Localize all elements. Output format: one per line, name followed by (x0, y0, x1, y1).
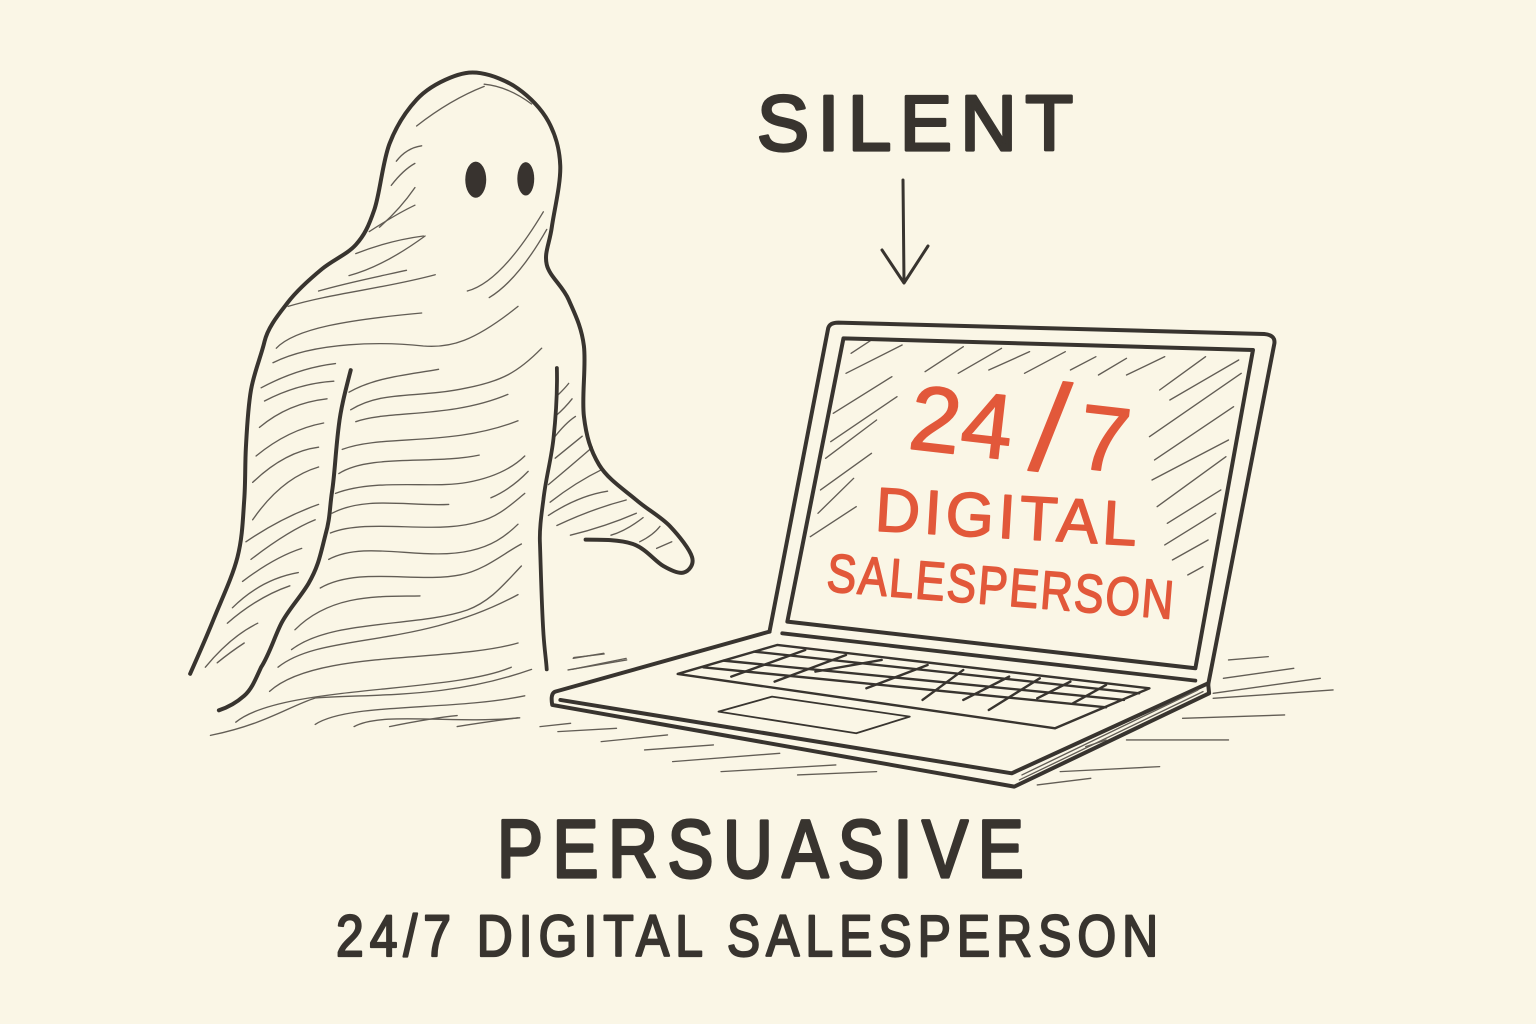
touchpad (718, 697, 910, 733)
icon: ghost left eye (465, 162, 486, 198)
screen text: 24/7: 4 (956, 373, 1019, 480)
laptop lid outer frame (770, 323, 1274, 685)
illustration: ghost (190, 73, 693, 735)
screen text: SALESPERSON: SALESPERSON (825, 543, 1176, 631)
screen text: 24/7: 7 (1073, 386, 1136, 493)
screen text: 24/7: / (1025, 358, 1076, 500)
arrow: pointing down to laptop (882, 180, 928, 283)
laptop screen bezel (787, 338, 1253, 668)
laptop base (552, 632, 1209, 787)
laptop hinge line (782, 633, 1195, 681)
laptop base side shading (1019, 690, 1203, 780)
screen text: DIGITAL: DIGITAL (873, 476, 1139, 560)
ghost outline (190, 73, 693, 674)
icon: ghost right eye (517, 162, 534, 196)
screen hatching (810, 340, 1241, 575)
ghost left arm line (219, 370, 351, 710)
heading: SILENT: SILENT (757, 79, 1073, 167)
ghost right arm line (540, 368, 557, 669)
heading: PERSUASIVE: PERSUASIVE (497, 803, 1024, 895)
screen text: 24/7: 2 (904, 367, 967, 474)
illustration: laptop (540, 323, 1333, 787)
subheading: 24/7 DIGITAL SALESPERSON: 24/7 DIGITAL SALESPERSON (336, 905, 1158, 969)
ghost body hatching (205, 84, 672, 735)
floor hatching (540, 653, 1333, 785)
keyboard (678, 645, 1149, 728)
